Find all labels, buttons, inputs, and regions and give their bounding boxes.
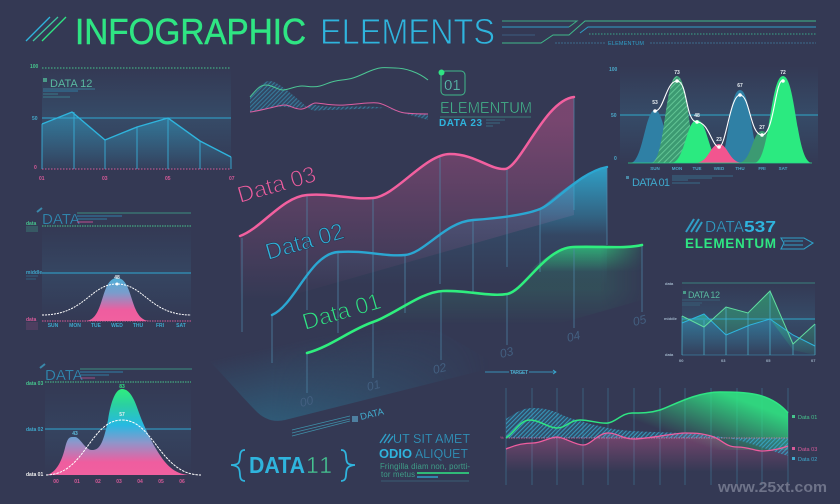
day labels: SUN — [650, 166, 660, 171]
day labels: THU — [735, 166, 745, 171]
day labels: SUN — [48, 323, 59, 329]
callout: 01 elementum — [438, 70, 532, 129]
badge: data 11: DATA — [249, 452, 305, 478]
title — [26, 11, 495, 52]
axis labels — [30, 64, 235, 182]
axis labels: data — [665, 352, 674, 357]
text block: ut sit amet — [379, 431, 470, 481]
value labels — [652, 70, 786, 143]
header small label: ELEMENTUM — [608, 41, 644, 47]
title word: infographic: INFOGRAPHIC — [75, 11, 306, 52]
main chart axis labels: 05 — [631, 312, 648, 329]
icon: arrow — [781, 238, 813, 249]
axis labels: 05 — [165, 176, 171, 182]
axis labels: 50 — [32, 116, 38, 122]
axis labels — [664, 281, 816, 363]
line label: data 01: Data 01 — [299, 288, 384, 335]
text block: ut sit amet: Fringilla diam non, portti- — [380, 462, 470, 471]
day labels: THU — [133, 323, 144, 329]
day labels: SAT — [779, 166, 788, 171]
axis labels: 00 — [679, 358, 684, 363]
target arrow: TARGET — [510, 370, 528, 376]
day labels — [650, 166, 788, 171]
panel: top-right bell chart — [609, 66, 818, 189]
axis labels: middle — [664, 316, 678, 321]
callout: data537 elementum: DATA — [705, 219, 744, 236]
main chart: data 01 — [299, 245, 642, 395]
axis labels: 03 — [102, 176, 108, 182]
axis labels: 05 — [766, 358, 771, 363]
watermark: www.25xt.com — [717, 479, 827, 496]
x labels: 04 — [137, 479, 143, 485]
axis labels — [609, 67, 618, 162]
day labels: FRI — [156, 323, 165, 329]
panel: right mid area chart — [664, 281, 816, 363]
heading: data 12: DATA 12 — [688, 290, 720, 300]
day labels: TUE — [91, 323, 102, 329]
x labels: 06 — [179, 479, 185, 485]
callout: 01 elementum: 01 — [444, 77, 461, 94]
heading: data 12: DATA 12 — [50, 78, 92, 90]
value labels: 43 — [72, 431, 78, 437]
data points — [653, 79, 785, 149]
badge: data 11: 11 — [306, 452, 332, 478]
value labels: 48 — [694, 113, 700, 119]
main chart axis labels: 04 — [565, 328, 582, 345]
x labels: 05 — [158, 479, 164, 485]
axis labels: 07 — [811, 358, 816, 363]
panel: perspective floor — [224, 355, 434, 421]
main chart axis labels: 00 — [298, 393, 315, 410]
main chart axis labels — [298, 312, 648, 410]
value labels: 83 — [119, 384, 125, 390]
line label: data 02: Data 02 — [262, 218, 347, 265]
panel: left bell chart — [26, 208, 191, 329]
panel: top-left line chart — [30, 64, 235, 182]
main chart axis labels: 01 — [365, 377, 382, 394]
x labels — [53, 479, 185, 485]
day labels: FRI — [758, 166, 766, 171]
line label: data 03: Data 03 — [234, 161, 319, 208]
main chart: data 03 — [234, 97, 574, 332]
axis labels: 0 — [34, 165, 37, 171]
day labels: SAT — [176, 323, 186, 329]
axis labels — [26, 381, 43, 478]
legend — [792, 415, 817, 463]
day labels: MON — [672, 166, 682, 171]
pink series area — [506, 433, 788, 480]
panel: bottom-right multi-line chart: % — [500, 435, 504, 440]
axis labels: data — [26, 317, 36, 323]
value labels: 23 — [716, 137, 722, 143]
value labels: 73 — [674, 70, 680, 76]
text block: ut sit amet: tor metus — [381, 470, 415, 479]
axis labels: 100 — [30, 64, 39, 70]
axis labels: 01 — [39, 176, 45, 182]
axis labels: data 03 — [26, 381, 43, 387]
axis labels: data — [26, 221, 36, 227]
callout: 01 elementum: ELEMENTUM — [440, 100, 532, 117]
callout: data537 elementum: 537 — [744, 219, 776, 236]
x labels: 01 — [74, 479, 80, 485]
main chart axis labels: 02 — [431, 360, 448, 377]
legend: Data 01 — [798, 415, 817, 421]
callout: data537 elementum: ELEMENTUM — [685, 236, 776, 251]
legend: Data 03 — [798, 447, 817, 453]
axis labels: data 01 — [26, 472, 43, 478]
text block: ut sit amet: ODIO — [379, 446, 412, 461]
value labels: 57 — [119, 412, 125, 418]
floor label: data: DATA — [359, 406, 386, 423]
x labels: 03 — [116, 479, 122, 485]
main chart: data 02 — [262, 167, 607, 370]
text block: ut sit amet: ALIQUET — [415, 446, 468, 461]
target arrow — [485, 370, 556, 376]
axis labels: middle — [26, 270, 42, 276]
axis labels: 50 — [611, 113, 617, 119]
callout: data537 elementum — [685, 219, 813, 251]
value labels: 53 — [652, 100, 658, 106]
panel: mini line chart top centre — [250, 68, 428, 120]
axis labels — [26, 221, 42, 323]
badge: data 11 — [231, 450, 355, 481]
axis labels: data 02 — [26, 427, 43, 433]
axis labels: data — [665, 281, 674, 286]
text block: ut sit amet: UT SIT AMET — [393, 431, 470, 446]
title word: elements: ELEMENTS — [320, 11, 495, 52]
axis labels: 100 — [609, 67, 618, 73]
panel: left mountain chart — [26, 364, 201, 485]
floor label: data — [292, 406, 386, 436]
value labels: 67 — [737, 83, 743, 89]
heading: data: DATA — [45, 367, 83, 384]
heading: data: DATA — [42, 211, 80, 228]
legend: Data 02 — [798, 457, 817, 463]
caption: data 01: DATA 01 — [632, 177, 670, 189]
value labels — [72, 384, 125, 437]
value labels: 27 — [759, 125, 765, 131]
axis labels: 03 — [721, 358, 726, 363]
icon: title slashes — [26, 17, 66, 41]
header circuit lines — [502, 21, 816, 47]
panel: left bell chart: 48 — [114, 275, 120, 281]
day labels — [48, 323, 186, 329]
value labels: 72 — [780, 70, 786, 76]
day labels: TUE — [692, 166, 702, 171]
axis labels: 07 — [229, 176, 235, 182]
green series — [506, 392, 788, 450]
day labels: WED — [111, 323, 123, 329]
x labels: 02 — [95, 479, 101, 485]
main chart axis labels: 03 — [498, 344, 515, 361]
x labels: 00 — [53, 479, 59, 485]
day labels: MON — [69, 323, 81, 329]
day labels: WED — [714, 166, 725, 171]
panel: bottom-right multi-line chart — [500, 388, 817, 485]
blue hatched series — [506, 408, 788, 456]
axis labels: 0 — [614, 156, 617, 162]
callout: 01 elementum: DATA 23 — [439, 118, 482, 129]
